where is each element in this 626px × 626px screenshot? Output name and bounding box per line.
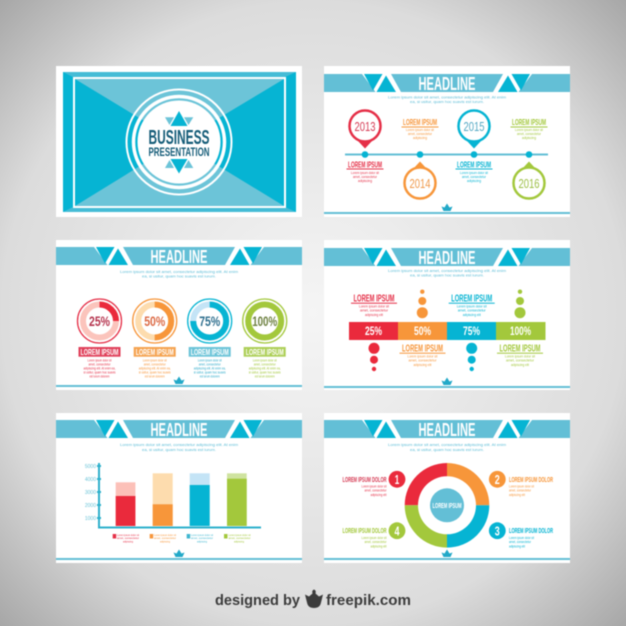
y axis labels — [85, 464, 96, 522]
text block: intro: ea, si usitur, quam hoc suavis est iurum. — [142, 448, 216, 452]
item 4 — [342, 522, 405, 548]
dots: orange — [417, 290, 428, 318]
ring: 25% — [78, 299, 122, 343]
ring: 25%: 25% — [89, 314, 110, 329]
label: blue: Lorem ipsum dolor sit — [460, 171, 488, 175]
label: orange: Lorem ipsum dolor sit — [406, 128, 434, 132]
item 3: LOREM IPSUM DOLOR — [509, 528, 553, 535]
timeline axis — [345, 154, 548, 156]
timeline nodes — [362, 151, 532, 158]
panel: bar chart — [56, 413, 302, 563]
label: blue: si usitur, quam hoc suavis — [194, 370, 226, 374]
text block: intro: Lorem ipsum dolor sit amet, consectetur adipiscing elit. At enim — [388, 96, 506, 100]
y axis labels: 4000 — [85, 477, 96, 483]
panel: business presentation cover — [56, 66, 302, 217]
label: green: amet, consectetur — [254, 362, 276, 366]
label: blue: Lorem ipsum dolor sit — [198, 358, 222, 362]
legend: amet, consectetur — [117, 536, 139, 540]
label: red: LOREM IPSUM — [348, 160, 382, 170]
label: red: amet, consectetur — [360, 308, 389, 312]
label: orange — [402, 117, 438, 140]
item 1: 1 — [395, 472, 399, 487]
icon: bottom star — [165, 159, 193, 174]
heading: HEADLINE — [418, 248, 476, 268]
label: green: LOREM IPSUM — [246, 347, 284, 357]
item 2: amet, consectetur — [509, 488, 532, 492]
label: red: Lorem ipsum dolor sit — [351, 171, 379, 175]
label: red: adipiscing elit. At enim ea, — [84, 366, 116, 370]
center label: LOREM IPSUM — [432, 501, 462, 510]
label: red — [78, 347, 120, 378]
item 4: Lorem ipsum dolor sit — [362, 536, 386, 540]
legend — [113, 533, 251, 544]
legend: Lorem ipsum dolor sit — [228, 533, 251, 537]
label: blue: adipiscing elit — [463, 313, 481, 317]
text block: intro — [120, 443, 238, 452]
item 1 — [342, 471, 405, 497]
legend: amet, consectetur — [228, 536, 251, 540]
dots: green — [514, 290, 526, 318]
label: blue: Lorem ipsum dolor sit — [457, 304, 487, 308]
panel: donut chart — [324, 413, 570, 563]
label: green: adipiscing — [522, 136, 536, 140]
y axis labels: 2000 — [85, 503, 96, 509]
legend: amet, consectetur — [191, 536, 213, 540]
legend: adipiscing — [197, 540, 207, 544]
heading: HEADLINE — [150, 247, 208, 267]
segmented bar: 100% — [510, 326, 531, 338]
bar: orange — [153, 473, 173, 526]
label: red: Lorem ipsum dolor sit — [88, 358, 112, 362]
label: green: LOREM IPSUM — [500, 344, 540, 354]
label: green: adipiscing elit. At enim ea, — [249, 366, 281, 370]
bar chart — [85, 463, 261, 528]
pin: 2014: 2014 — [410, 176, 430, 191]
item 3 — [489, 522, 553, 548]
item 3: 3 — [495, 523, 500, 538]
legend: Lorem ipsum dolor sit — [117, 533, 139, 537]
y axis labels: 3000 — [85, 490, 96, 496]
item 2: LOREM IPSUM DOLOR — [509, 477, 553, 484]
heading: HEADLINE — [150, 420, 208, 440]
label: blue — [456, 160, 492, 183]
legend: Lorem ipsum dolor sit — [191, 533, 213, 537]
axes — [97, 463, 261, 528]
label: red — [351, 294, 397, 317]
label: green: Lorem ipsum dolor sit — [253, 358, 277, 362]
text block: intro: ea, si usitur, quam hoc suavis est iurum. — [410, 448, 484, 452]
legend: adipiscing — [160, 540, 170, 544]
label: red: amet, consectetur — [88, 362, 111, 366]
legend: Lorem ipsum dolor sit — [154, 533, 176, 537]
ring: 75% — [188, 299, 232, 343]
label: orange: amet, consectetur — [408, 358, 437, 362]
label: blue: LOREM IPSUM — [191, 347, 229, 357]
item 1: Lorem ipsum dolor sit — [362, 484, 386, 488]
text block: intro — [388, 269, 506, 278]
footer credit: designed by — [215, 592, 301, 609]
icon: central badge rings — [126, 90, 232, 194]
ring: 75%: 75% — [199, 314, 220, 329]
text block: intro: ea, si usitur, quam hoc suavis est iurum. — [142, 274, 216, 278]
legend: adipiscing — [123, 540, 133, 544]
icon: freepik crown — [305, 590, 323, 608]
label: blue — [189, 347, 231, 378]
bar: green — [227, 473, 247, 526]
y axis labels: 5000 — [85, 464, 96, 470]
label: green — [510, 117, 548, 140]
pin: 2013: 2013 — [354, 119, 376, 134]
label: orange: adipiscing — [413, 136, 427, 140]
footer credit — [215, 590, 411, 609]
label: blue: amet, consectetur — [458, 308, 486, 312]
bar: blue — [190, 473, 210, 526]
heading: HEADLINE — [418, 420, 476, 440]
label: green — [497, 344, 543, 367]
heading: HEADLINE — [418, 74, 476, 94]
text block: intro: Lorem ipsum dolor sit amet, consectetur adipiscing elit. At enim — [120, 443, 238, 447]
label: green: Lorem ipsum dolor sit — [515, 128, 543, 132]
label: green: Lorem ipsum dolor sit — [505, 354, 535, 358]
text block: intro: ea, si usitur, quam hoc suavis est iurum. — [410, 274, 484, 278]
label: blue: adipiscing — [467, 179, 481, 183]
label: green: LOREM IPSUM — [512, 117, 546, 127]
label: orange: est iurum dolorem — [145, 374, 165, 378]
label: orange: amet, consectetur — [408, 132, 433, 136]
segmented bar: 75% — [463, 326, 480, 338]
label: green: amet, consectetur — [517, 132, 542, 136]
legend: adipiscing — [234, 540, 244, 544]
text block: intro — [388, 96, 506, 104]
dots: blue — [466, 343, 477, 371]
label: orange: si usitur, quam hoc suavis — [139, 370, 171, 374]
text block: intro: Lorem ipsum dolor sit amet, consectetur adipiscing elit. At enim — [388, 269, 506, 273]
title — [148, 127, 210, 159]
bar: red — [116, 482, 135, 526]
ring: 100% — [243, 299, 287, 343]
label: orange: LOREM IPSUM — [403, 117, 437, 127]
segmented bar: 50% — [414, 326, 431, 338]
label: orange: Lorem ipsum dolor sit — [408, 354, 438, 358]
label: red: LOREM IPSUM — [354, 294, 394, 304]
item 3: adipiscing elit — [509, 544, 525, 548]
title: PRESENTATION — [148, 145, 210, 159]
legend: amet, consectetur — [154, 536, 176, 540]
label: orange: LOREM IPSUM — [136, 347, 174, 357]
panel: percentage rings — [56, 240, 302, 390]
text block: intro — [120, 270, 238, 278]
panel: timeline — [324, 66, 570, 217]
label: blue: amet, consectetur — [199, 362, 221, 366]
pin: 2016 — [514, 162, 544, 198]
label: blue: est iurum dolorem — [200, 374, 220, 378]
donut chart — [405, 463, 489, 548]
panel: percentage bar — [324, 240, 570, 390]
item 4: 4 — [394, 523, 400, 538]
ring: 100%: 100% — [252, 314, 277, 329]
item 2 — [489, 471, 553, 497]
label: blue — [449, 294, 495, 317]
label: orange: Lorem ipsum dolor sit — [143, 358, 167, 362]
pin: 2014 — [404, 162, 436, 198]
label: blue: LOREM IPSUM — [451, 294, 492, 304]
label: orange: LOREM IPSUM — [402, 344, 443, 354]
pin: 2015 — [458, 110, 490, 148]
label: green: amet, consectetur — [506, 358, 535, 362]
ring: 50% — [133, 299, 177, 343]
item 3: amet, consectetur — [509, 540, 532, 544]
label: red: LOREM IPSUM — [80, 347, 118, 357]
label: red: Lorem ipsum dolor sit — [359, 304, 389, 308]
item 4: LOREM IPSUM DOLOR — [342, 528, 386, 535]
icon: top star — [165, 111, 193, 126]
label: orange: adipiscing elit — [414, 363, 432, 367]
label: red: si usitur, quam hoc suavis — [84, 370, 116, 374]
label: blue: amet, consectetur — [462, 175, 487, 179]
label: orange — [400, 344, 446, 367]
dots: red — [368, 343, 380, 371]
item 1: amet, consectetur — [364, 488, 387, 492]
item 3: Lorem ipsum dolor sit — [509, 536, 534, 540]
pin: 2015: 2015 — [464, 119, 484, 134]
segmented bar: 25% — [365, 326, 382, 338]
label: orange: adipiscing elit. At enim ea, — [139, 366, 171, 370]
item 1: LOREM IPSUM DOLOR — [342, 477, 386, 484]
label: red — [346, 160, 384, 183]
y axis labels: 1000 — [85, 516, 96, 522]
label: red: adipiscing elit — [365, 313, 383, 317]
label: blue: adipiscing elit. At enim ea, — [194, 366, 226, 370]
label: green: est iurum dolorem — [255, 374, 275, 378]
text block: intro: Lorem ipsum dolor sit amet, consectetur adipiscing elit. At enim — [120, 270, 238, 274]
label: green: si usitur, quam hoc suavis — [249, 370, 281, 374]
label: red: adipiscing — [358, 179, 372, 183]
pin: 2013 — [350, 110, 380, 148]
footer credit: freepik.com — [326, 592, 411, 609]
text block: intro: Lorem ipsum dolor sit amet, consectetur adipiscing elit. At enim — [388, 443, 506, 447]
item 2: 2 — [495, 472, 500, 487]
item 2: Lorem ipsum dolor sit — [509, 484, 534, 488]
label: green: adipiscing elit — [511, 363, 529, 367]
item 4: adipiscing elit — [370, 544, 386, 548]
label: red: est iurum dolorem — [90, 374, 110, 378]
item 2: adipiscing elit — [509, 493, 525, 497]
item 4: amet, consectetur — [364, 540, 387, 544]
text block: intro — [388, 443, 506, 452]
title: BUSINESS — [148, 127, 210, 149]
segmented bar — [349, 322, 546, 340]
label: blue: LOREM IPSUM — [457, 160, 491, 170]
label: red: amet, consectetur — [353, 175, 378, 179]
label: orange: amet, consectetur — [144, 362, 166, 366]
label: green — [244, 347, 286, 378]
pin: 2016: 2016 — [518, 176, 540, 191]
item 1: adipiscing elit — [370, 493, 386, 497]
ring: 50%: 50% — [144, 314, 165, 329]
text block: intro: ea, si usitur, quam hoc suavis est iurum. — [410, 100, 484, 104]
label: orange — [134, 347, 176, 378]
